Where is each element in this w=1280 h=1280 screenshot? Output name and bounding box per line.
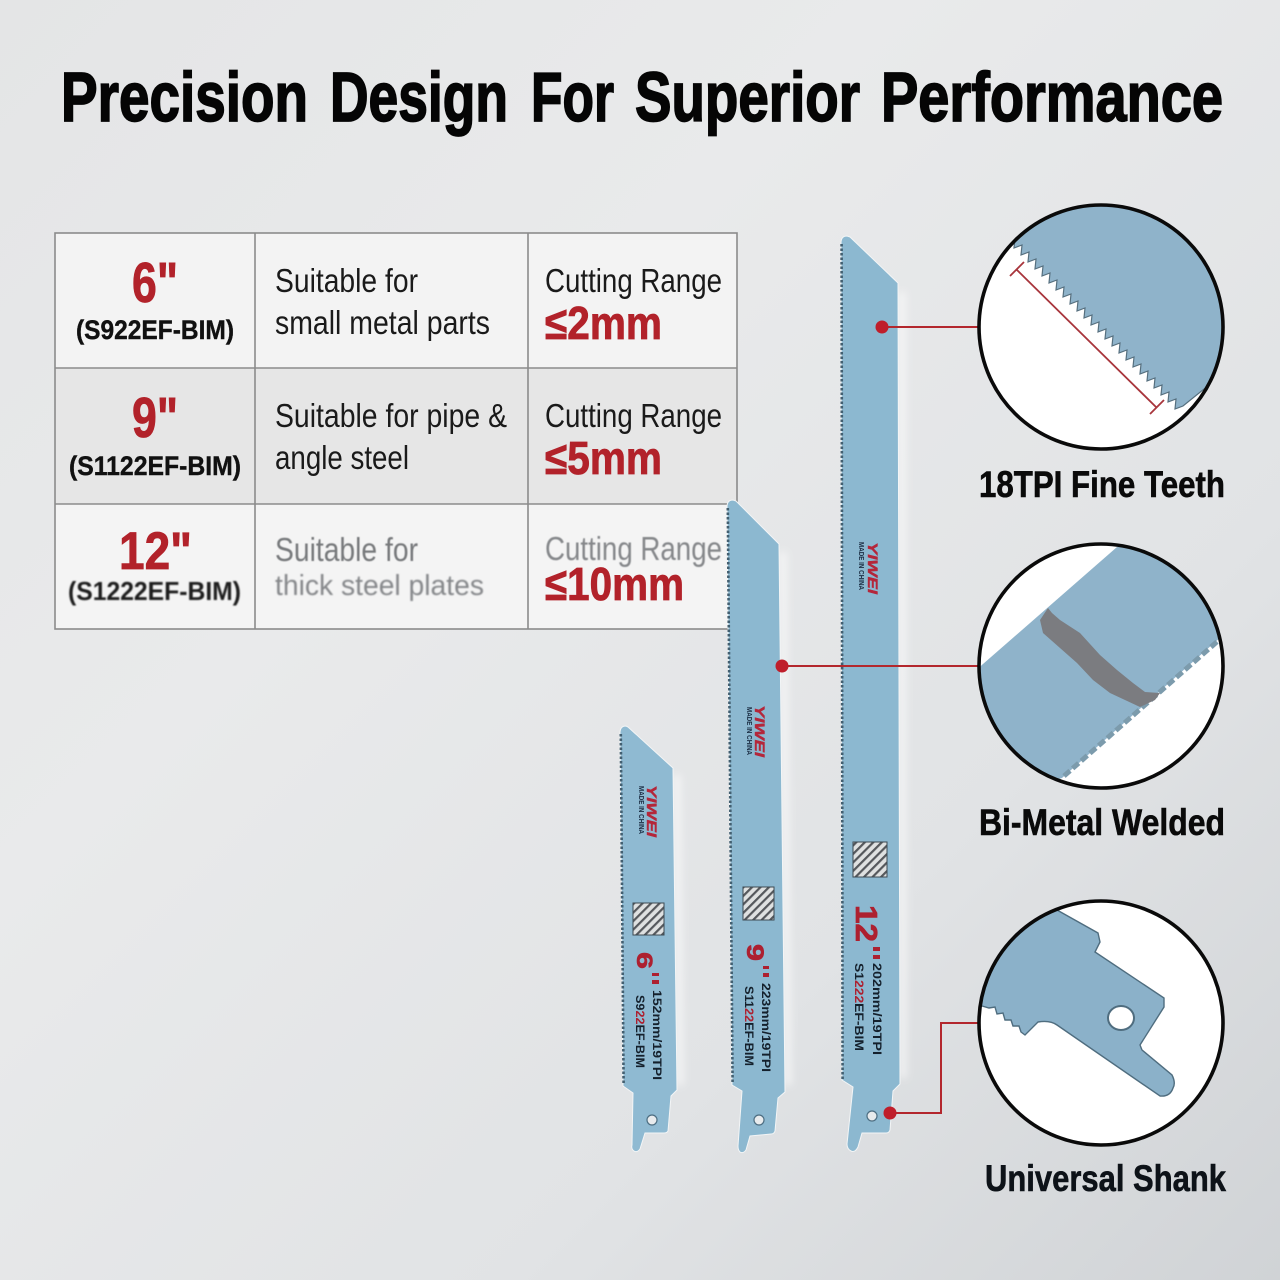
certification badge xyxy=(743,887,774,920)
logo: YIWEI xyxy=(752,705,768,758)
made in china: MADE IN CHINA xyxy=(857,542,866,590)
table row: 9 inch: angle steel xyxy=(275,439,409,476)
shank hole xyxy=(1108,1006,1134,1030)
title: For xyxy=(531,58,614,136)
connector: shank xyxy=(884,1023,979,1120)
table row: 9 inch xyxy=(69,386,722,484)
table row: 12 inch: Cutting Range xyxy=(545,530,722,567)
table row: 12 inch: 12" xyxy=(119,522,192,581)
9 inch blade xyxy=(727,500,788,1153)
hole xyxy=(647,1115,657,1125)
title: Superior xyxy=(635,58,860,136)
logo: YIWEI xyxy=(644,785,660,838)
label: fine teeth: 18TPI Fine Teeth xyxy=(979,464,1225,505)
inch marks xyxy=(873,947,880,959)
table row: 12 inch: Suitable for xyxy=(275,531,418,568)
table row: 6 inch: Suitable for xyxy=(275,262,418,299)
table row: 9 inch: Cutting Range xyxy=(545,397,722,434)
model number: S11 22 EF-BIM xyxy=(742,986,754,1066)
title xyxy=(61,58,1223,136)
table row: 6 inch: ≤2mm xyxy=(545,297,662,349)
table row: 9 inch: 9" xyxy=(132,386,178,450)
spec table xyxy=(55,233,737,629)
size mark: 6 xyxy=(632,952,657,969)
table row: 12 inch xyxy=(68,522,722,610)
certification badge xyxy=(853,842,887,877)
inch marks xyxy=(763,966,769,977)
title: Precision xyxy=(61,58,308,136)
table row: 6 inch: small metal parts xyxy=(275,304,490,341)
table row: 12 inch: thick steel plates xyxy=(275,570,484,602)
size mark: 9 xyxy=(741,944,768,961)
detail circle: bi-metal weld xyxy=(977,542,1225,790)
title: Design xyxy=(330,58,508,136)
label: weld: Bi-Metal Welded xyxy=(979,802,1225,843)
size mark: 12 xyxy=(849,905,884,942)
connector: teeth xyxy=(876,320,979,334)
table row: 6 inch: Cutting Range xyxy=(545,262,722,299)
table row: 6 inch: 6" xyxy=(132,251,178,315)
6 inch blade xyxy=(620,726,680,1152)
length and TPI: 202mm/19TPI xyxy=(870,963,884,1055)
model number: S9 22 EF-BIM xyxy=(633,995,645,1068)
label: shank: Universal Shank xyxy=(985,1158,1226,1199)
model number: S1 222 EF-BIM xyxy=(852,963,864,1051)
made in china: MADE IN CHINA xyxy=(745,707,754,755)
detail circle: universal shank xyxy=(960,900,1223,1145)
weld seam xyxy=(1040,608,1160,707)
hole xyxy=(754,1115,764,1125)
table row: 6 inch xyxy=(76,251,722,349)
made in china: MADE IN CHINA xyxy=(637,786,646,834)
measurement bracket xyxy=(1010,262,1164,414)
detail circle: fine teeth xyxy=(979,190,1240,449)
length and TPI: 223mm/19TPI xyxy=(759,983,773,1072)
table row: 6 inch: (S922EF-BIM) xyxy=(76,315,234,345)
table row: 12 inch: (S1222EF-BIM) xyxy=(68,576,241,606)
12 inch blade xyxy=(841,236,903,1152)
connector: weld xyxy=(776,660,979,672)
table row: 9 inch: ≤5mm xyxy=(545,432,662,484)
table row: 12 inch: ≤10mm xyxy=(545,558,684,610)
certification badge xyxy=(633,903,664,935)
table row: 9 inch: Suitable for pipe & xyxy=(275,397,507,434)
hole xyxy=(867,1111,877,1121)
table row: 9 inch: (S1122EF-BIM) xyxy=(69,451,241,481)
length and TPI: 152mm/19TPI xyxy=(650,990,664,1080)
inch marks xyxy=(652,973,659,984)
logo: YIWEI xyxy=(865,542,881,595)
